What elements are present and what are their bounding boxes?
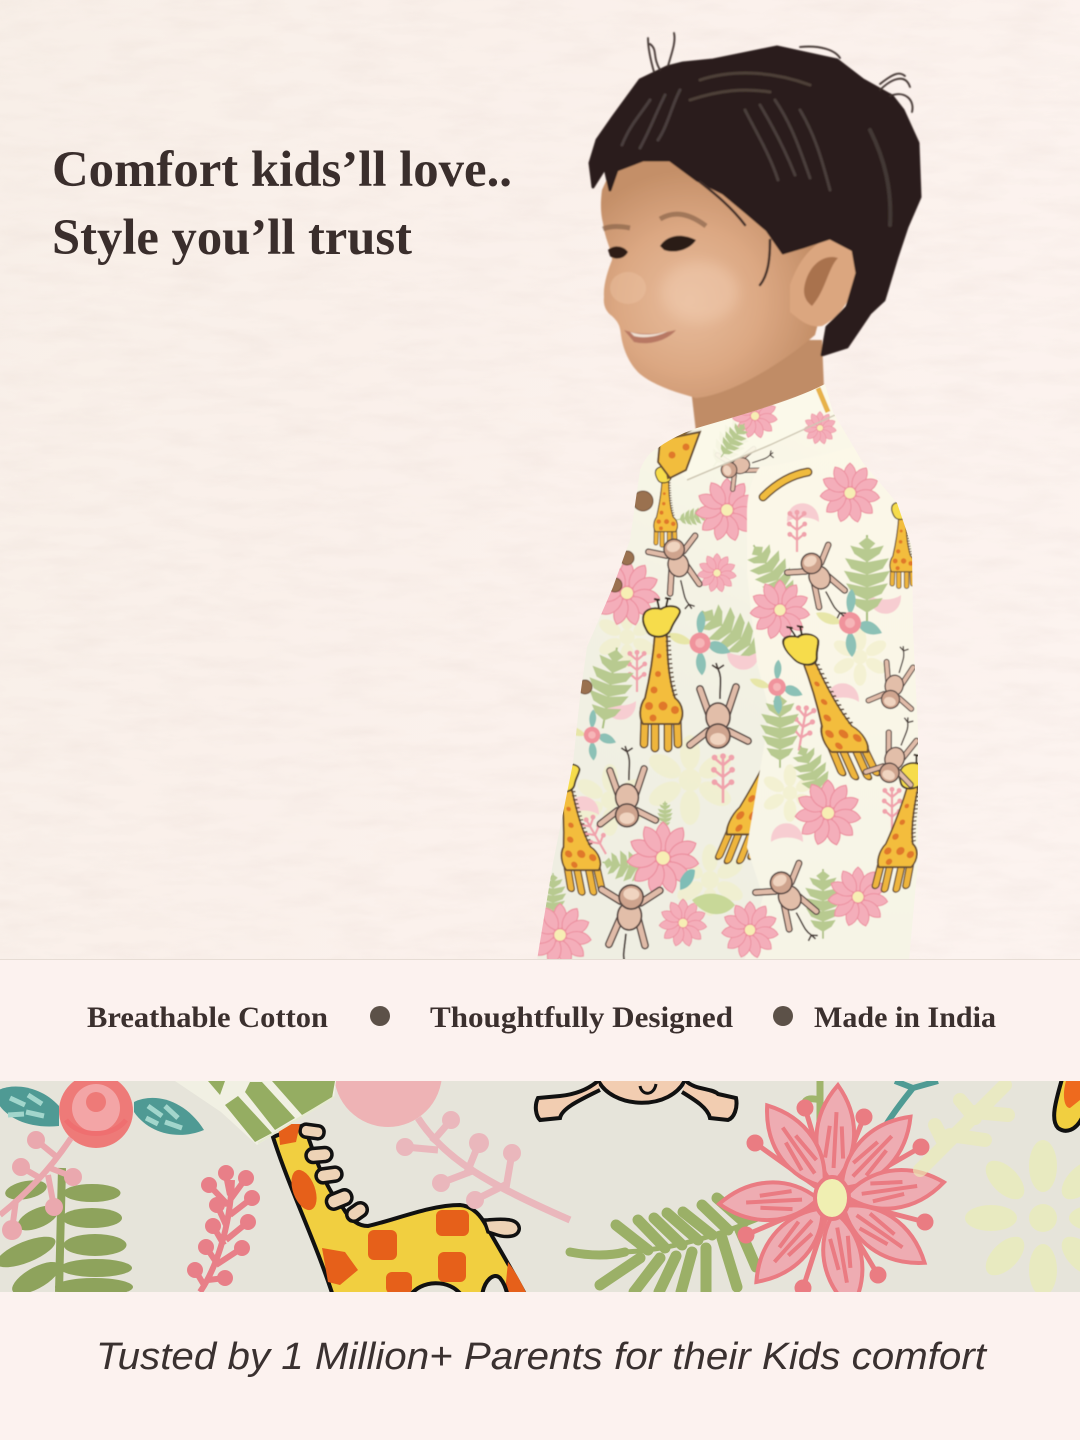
icon: centre fern xyxy=(570,1198,765,1292)
eyebrows xyxy=(603,214,706,229)
giraffe spots xyxy=(278,1124,526,1294)
icon: top stems xyxy=(802,1081,939,1122)
bullet dot xyxy=(773,1006,793,1026)
headline: Style you’ll trust xyxy=(52,210,412,266)
feature: made in india: Made in India xyxy=(814,1001,996,1034)
giraffe tail xyxy=(484,1219,519,1237)
icon: giraffe foot at edge xyxy=(1054,1079,1080,1131)
headline: Comfort kids’ll love.. xyxy=(52,142,512,198)
icon: collar flap xyxy=(175,1081,336,1145)
icon: pink blossom circle xyxy=(336,1081,442,1127)
sleeve xyxy=(746,466,812,860)
neck xyxy=(690,340,824,432)
mouth xyxy=(624,330,676,343)
icon: large pink flower xyxy=(718,1084,947,1313)
icon: left fern xyxy=(0,1168,133,1301)
icon: coral branch xyxy=(187,1165,260,1292)
fabric print band xyxy=(0,1081,1080,1292)
hair highlights and wisps xyxy=(622,33,913,285)
button placket xyxy=(578,491,653,694)
front panel print xyxy=(538,429,774,959)
photo: child in printed kurta xyxy=(528,33,940,972)
trust footer xyxy=(0,1292,1080,1440)
hair xyxy=(590,47,920,355)
collar print xyxy=(658,388,837,480)
face xyxy=(601,140,835,398)
eye near xyxy=(660,236,696,252)
nose highlight xyxy=(610,272,646,304)
feature: thoughtfully designed: Thoughtfully Designed xyxy=(430,1001,733,1034)
icon: left coral sprig xyxy=(0,1131,82,1240)
giraffe belly gaps xyxy=(410,1281,462,1292)
trust statement: Tusted by 1 Million+ Parents for their Kids comfort xyxy=(96,1336,988,1378)
divider strip line xyxy=(0,959,1080,960)
cheek highlight xyxy=(662,262,738,322)
head and neck xyxy=(590,33,920,432)
feature: breathable cotton: Breathable Cotton xyxy=(87,1001,328,1034)
icon: pale green sprig xyxy=(920,1085,1008,1170)
icon: rose with teal leaves xyxy=(0,1074,204,1148)
feature strip xyxy=(0,960,1080,1081)
giraffe mane xyxy=(299,1123,370,1224)
bullet dot xyxy=(370,1006,390,1026)
sleeve print xyxy=(721,463,940,959)
flower stamens xyxy=(740,1102,931,1294)
kurta shirt xyxy=(538,384,918,959)
icon: pale yellow flower xyxy=(965,1140,1080,1296)
headline xyxy=(52,142,512,266)
icon: large giraffe xyxy=(273,1123,526,1296)
ear xyxy=(790,238,857,326)
icon: monkey on fabric xyxy=(536,1078,737,1120)
collar xyxy=(685,419,758,468)
icon: centre coral branch xyxy=(396,1111,570,1220)
eye far xyxy=(608,246,628,259)
